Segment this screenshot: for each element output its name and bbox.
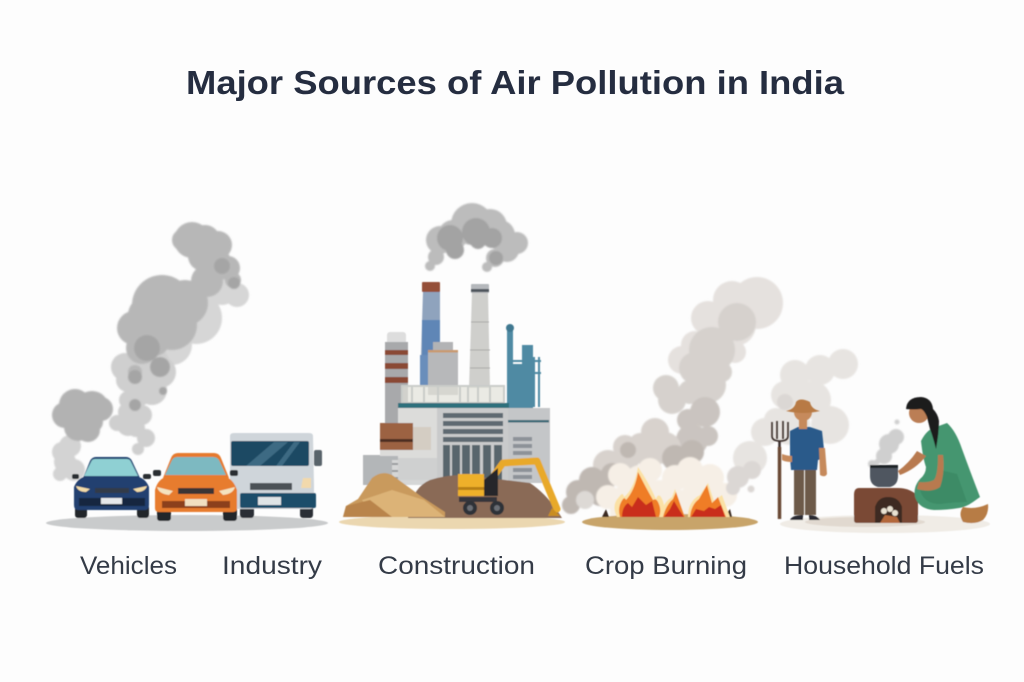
ground shadow: vehicles (46, 515, 328, 531)
sand pile (343, 473, 445, 517)
panel: vehicles (46, 222, 328, 531)
smoke: stove (868, 420, 904, 468)
icon: farmer with pitchfork (772, 400, 827, 520)
smoke: vehicles small plume (52, 389, 113, 481)
labels row (80, 552, 984, 580)
chimney: blue stack (420, 282, 440, 387)
smoke: crop fire plume (562, 277, 783, 514)
head and hat (794, 403, 812, 421)
label: Industry: Industry (222, 552, 323, 580)
arms (898, 451, 944, 491)
smoke: factory (425, 203, 528, 272)
excavator (458, 461, 560, 516)
icon: orange car (153, 453, 238, 521)
skirt and dress (915, 423, 980, 510)
ground: burnt field (582, 514, 758, 530)
ground: household (780, 515, 990, 533)
panel: industry and construction (339, 203, 565, 529)
smoke: crop fire glow (596, 457, 737, 517)
rooftop railing (402, 386, 504, 403)
teal refinery (506, 324, 541, 408)
shirt and arms (790, 427, 825, 470)
smoke: vehicles large plume (109, 222, 249, 455)
icon: van (230, 433, 322, 518)
feet (960, 504, 988, 523)
center block (428, 342, 458, 395)
low left building (363, 455, 438, 485)
pitchfork (772, 421, 788, 519)
chimney: white stack (469, 284, 490, 388)
smoke: drifting plume behind farmer (726, 349, 858, 495)
ground: construction (339, 515, 565, 529)
label: Vehicles: Vehicles (80, 552, 177, 580)
head (909, 403, 929, 423)
label: Construction: Construction (378, 552, 535, 580)
brown block (380, 423, 437, 456)
icon: blue car (72, 457, 151, 518)
title: Major Sources of Air Pollution in India (186, 64, 845, 101)
icon: cooking pot (870, 465, 898, 487)
label: Household Fuels: Household Fuels (784, 552, 984, 580)
chimney: left striped stack (385, 332, 408, 424)
legs (794, 470, 804, 515)
panel: household fuels (772, 397, 990, 533)
icon: clay stove (854, 488, 918, 523)
main building (398, 403, 550, 483)
panel: crop burning (562, 277, 858, 530)
flames (602, 467, 732, 517)
dirt mound (408, 475, 562, 518)
label: Crop Burning: Crop Burning (585, 552, 747, 580)
hair (906, 397, 939, 449)
icon: woman cooking (898, 397, 988, 523)
